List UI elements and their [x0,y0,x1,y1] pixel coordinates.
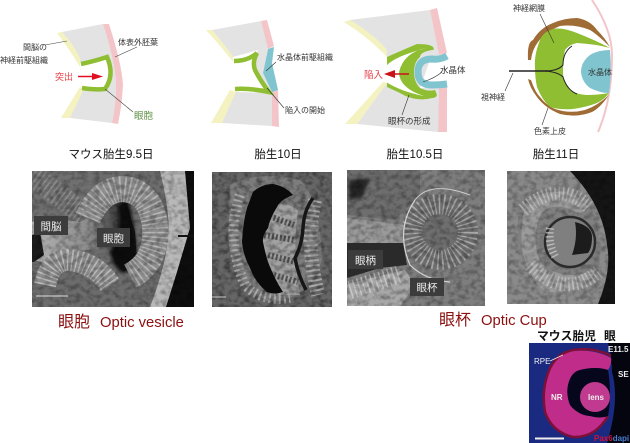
photo: optic vesicle SEM [32,171,194,307]
label: surface ectoderm [115,37,158,57]
optic cup magenta [544,351,611,437]
lens [581,50,611,93]
caption: day 10.5: 胎生10.5日 [387,147,443,161]
diagram: day 10.5 [344,8,466,132]
label: protrusion arrow: 突出 [55,71,73,82]
lens vesicle [418,56,447,85]
optic cup lumen [386,48,427,96]
label: surface ectoderm: 体表外胚葉 [118,37,158,47]
surface ectoderm band [150,171,190,307]
fluorescence image title: 眼 [604,329,616,343]
lens [580,382,610,412]
fluorescence image title: マウス胎児 [537,329,596,343]
label: Pax6 dapi: Pax6dapi [594,434,629,443]
label: formation of optic cup: 眼杯の形成 [388,116,431,126]
label: NR: NR [551,393,563,402]
vitreous space [567,368,610,418]
label: optic vesicle: 眼胞 [134,110,154,122]
diagram: mouse embryonic day 9.5 [0,24,158,124]
label box: optic cup: 眼杯 [416,281,438,294]
label box: optic vesicle [97,228,130,247]
label: optic vesicle [105,89,154,122]
label: lens: lens [588,393,605,402]
pigment epithelium [528,18,610,60]
heading: optic vesicle: Optic vesicle [100,315,184,331]
scale bar [535,438,564,440]
label: lens: 水晶体 [588,67,612,77]
heading: optic vesicle: 眼胞 [58,313,90,331]
label: lens: 水晶体 [440,65,466,75]
optic vesicle [81,57,111,89]
label box: diencephalon: 間脳 [40,221,62,233]
photo: optic cup SEM [347,170,485,306]
heading: optic cup: Optic Cup [481,313,547,329]
label box: diencephalon [34,216,68,235]
label: RPE: RPE [534,357,550,366]
caption: day 11: 胎生11日 [533,147,579,161]
label: SE: SE [618,370,629,379]
photo: day 10 SEM [212,172,332,307]
neural retina [535,28,610,109]
label: neural precursor tissue of diencephalon [0,41,67,65]
optic nerve [509,46,577,94]
label: neural precursor tissue of diencephalon: 神経前駆組織 [0,55,48,65]
label: pigment epithelium: 色素上皮 [534,126,566,136]
caption: day 10: 胎生10日 [254,147,302,161]
label: E11.5: E11.5 [608,345,629,354]
optic cup [387,44,437,99]
caption: day 9.5: マウス胎生9.5日 [68,147,154,161]
epithelium arcs [88,189,155,276]
invaginating neural tissue [234,53,269,91]
label box: optic vesicle: 眼胞 [103,232,124,245]
label: invagination arrow: 陥入 [364,69,384,81]
diagram: day 11 [481,0,612,136]
label: start of invagination: 陥入の開始 [285,105,325,115]
label box: optic stalk: 眼柄 [355,254,376,267]
fluorescence image: E11.5 mouse embryo eye [529,343,630,443]
photo: day 11 SEM [507,171,615,304]
label: neural precursor tissue of diencephalon: 間脳の [23,42,47,52]
label: lens precursor tissue: 水晶体前駆組織 [277,52,333,62]
diagram: day 10 [206,20,333,127]
heading: optic cup: 眼杯 [439,311,471,329]
label: protrusion arrow [55,71,103,82]
label: optic nerve: 視神経 [481,92,505,102]
label: neural retina: 神経網膜 [513,3,545,13]
